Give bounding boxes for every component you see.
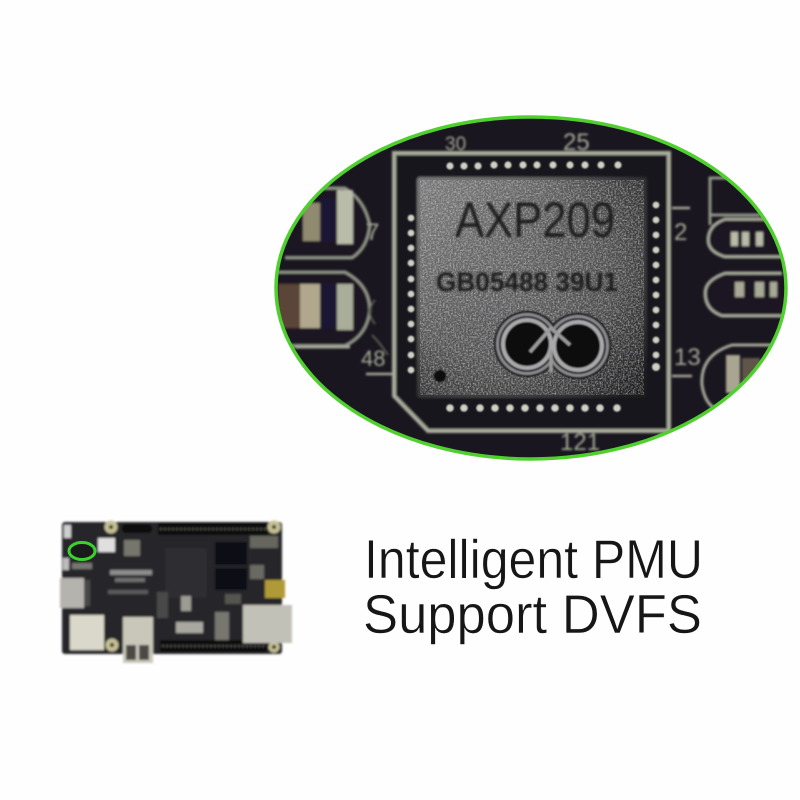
bottom gpio header bbox=[160, 640, 267, 652]
small components bbox=[124, 540, 140, 556]
green highlight ring on board bbox=[69, 542, 95, 560]
caption line 2: Support DVFS bbox=[363, 583, 702, 645]
camera connector bbox=[122, 524, 152, 533]
development board photo bbox=[60, 520, 292, 663]
caption line 1: Intelligent PMU bbox=[364, 528, 703, 590]
silkscreen labels bbox=[361, 129, 701, 456]
pcb background bbox=[270, 110, 795, 465]
sd card slot bbox=[70, 615, 104, 650]
silkscreen labels: 121 bbox=[560, 429, 600, 456]
silkscreen labels: 30 bbox=[445, 134, 466, 155]
silkscreen labels: 13 bbox=[674, 344, 701, 371]
usb port bbox=[123, 617, 153, 663]
main soc bbox=[165, 548, 207, 598]
memory chips bbox=[215, 542, 247, 565]
ethernet port bbox=[243, 605, 292, 643]
board pcb bbox=[62, 522, 282, 654]
mounting holes bbox=[104, 520, 280, 652]
top gpio header bbox=[158, 523, 268, 535]
chip pads bbox=[408, 161, 660, 412]
magnified chip photo in green oval bbox=[270, 110, 795, 465]
chip pin 1 dot bbox=[434, 370, 446, 382]
green oval outline bbox=[276, 117, 786, 459]
chip marking batch code: GB05488 39U1 bbox=[436, 267, 618, 297]
silkscreen labels: 25 bbox=[563, 129, 590, 156]
left components bbox=[278, 188, 392, 374]
chip manufacturer logo bbox=[494, 311, 611, 379]
caption bbox=[363, 528, 703, 645]
chip marking AXP209: AXP209 bbox=[455, 192, 615, 248]
silkscreen labels: 48 bbox=[361, 346, 385, 371]
header pins bbox=[160, 529, 266, 646]
right components bbox=[672, 178, 790, 410]
chip surface texture bbox=[420, 180, 644, 395]
silkscreen labels: 2 bbox=[674, 219, 687, 246]
board logo bbox=[110, 570, 152, 575]
hdmi port bbox=[60, 578, 84, 608]
mini usb port bbox=[265, 580, 285, 598]
small white connector bbox=[98, 538, 115, 552]
chip body bbox=[417, 177, 647, 398]
silkscreen chip outline bbox=[394, 153, 669, 431]
silkscreen labels: 7 bbox=[366, 219, 379, 246]
